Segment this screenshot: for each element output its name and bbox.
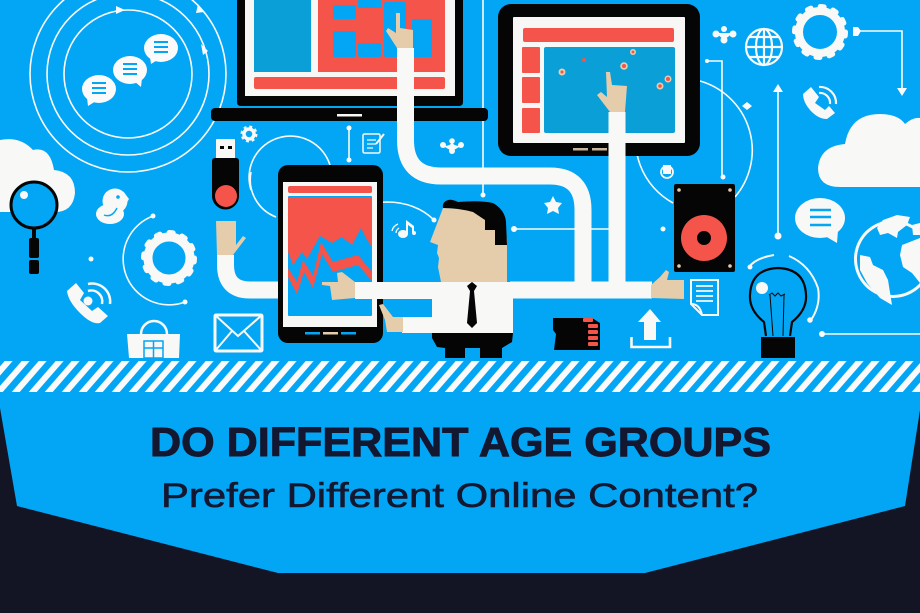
pointing hand <box>322 272 355 300</box>
icon: earth globe <box>854 215 920 305</box>
icon: star <box>544 196 562 214</box>
icon: music note <box>392 220 416 238</box>
hand pointing right <box>651 270 684 299</box>
icon: trident top right <box>712 26 736 44</box>
title line 2: Prefer Different Online Content? <box>161 477 758 515</box>
icon: usb drive <box>212 139 239 209</box>
icon: bird <box>96 188 129 224</box>
speech bubble right <box>795 198 845 243</box>
icon: shopping bag <box>127 321 180 358</box>
icon: phone right <box>803 87 836 119</box>
speech bubble 1 <box>82 75 116 106</box>
hair <box>443 200 507 245</box>
white arms linking devices <box>226 48 652 290</box>
icon: globe wireframe <box>746 29 782 65</box>
hand on laptop <box>386 13 413 48</box>
magnifying glass <box>11 182 57 274</box>
icon: upload <box>632 309 670 347</box>
chat bubbles in concentric rings <box>30 0 226 172</box>
icon: document <box>691 280 718 315</box>
icon: small gear <box>242 126 256 142</box>
trousers <box>432 333 513 358</box>
dark bottom banner shape <box>0 408 920 613</box>
man with tie <box>322 200 513 358</box>
hand on right tablet <box>597 72 627 112</box>
speech bubble 2 <box>113 56 147 87</box>
icon: envelope <box>215 315 262 351</box>
shirt and arms <box>355 282 513 333</box>
small tablet with chart <box>278 165 383 343</box>
thin connector lines <box>88 0 920 337</box>
icon: microphone <box>661 165 673 178</box>
icon: document note <box>363 134 384 153</box>
icon: trident connector <box>440 138 464 154</box>
speaker <box>674 184 735 272</box>
icon: gear top right <box>794 6 846 58</box>
light bulb <box>748 255 819 358</box>
speech bubble 3 <box>144 34 178 64</box>
icon: phone left <box>67 283 110 323</box>
right cloud <box>818 114 920 187</box>
lower hand <box>379 304 403 332</box>
title line 1: DO DIFFERENT AGE GROUPS <box>150 419 771 465</box>
head <box>430 208 507 282</box>
icon: sd card <box>553 318 600 350</box>
hand raised left <box>216 221 246 255</box>
icon: gear left <box>144 232 194 284</box>
tablet right <box>498 4 700 156</box>
hatched stripe band <box>0 361 920 392</box>
laptop <box>211 0 488 121</box>
tie <box>467 282 477 328</box>
left cloud <box>0 139 75 212</box>
title <box>150 419 771 515</box>
area chart <box>288 197 372 294</box>
